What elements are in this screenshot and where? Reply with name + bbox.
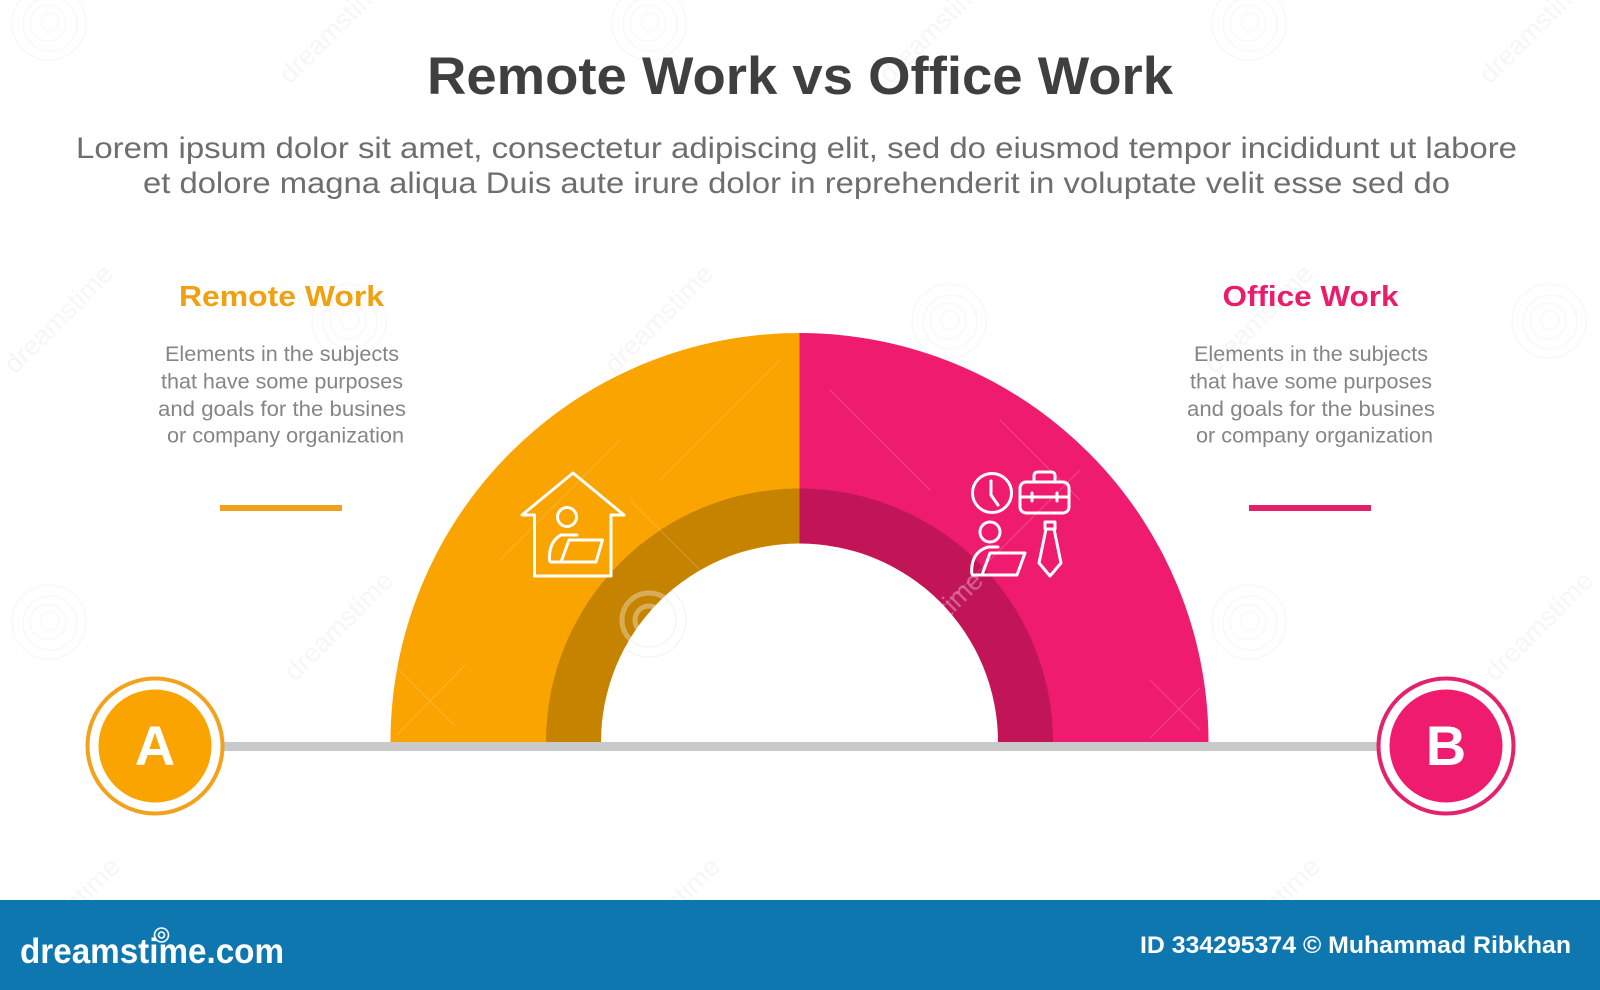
description: office work: Elements in the subjects [1194, 342, 1428, 366]
accent line: remote work [220, 505, 342, 511]
inner band: dark pink [800, 488, 1053, 742]
description: remote work [158, 342, 406, 448]
badge B: B [1426, 714, 1466, 777]
badge A: A [135, 714, 175, 777]
badge A [88, 678, 222, 814]
inner white cutout [601, 544, 998, 742]
icon: office work clock, briefcase, worker, tie [972, 472, 1069, 576]
subtitle text [76, 132, 1517, 200]
text: dreamstime [1478, 565, 1599, 686]
watermark spiral on band [622, 593, 676, 647]
description: remote work: Elements in the subjects [165, 342, 399, 366]
accent line: office work [1249, 505, 1371, 511]
heading: remote work: Remote Work [179, 281, 385, 313]
icon: remote work house with person and laptop [522, 473, 624, 576]
description: remote work: that have some purposes [161, 370, 403, 394]
description: office work: that have some purposes [1190, 370, 1432, 394]
semicircle chart [390, 333, 1208, 742]
description: remote work: and goals for the busines [158, 397, 406, 421]
text: dreamstime [1198, 258, 1319, 379]
baseline bar [215, 742, 1385, 751]
watermark on pink band: dreamstime [868, 565, 989, 686]
segment: office work pink [800, 333, 1208, 742]
badge B [1378, 678, 1514, 814]
inner band: dark orange [546, 488, 800, 742]
subtitle text: Lorem ipsum dolor sit amet, consectetur adipiscing elit, sed do eiusmod tempor incididunt ut labore [76, 132, 1517, 165]
title: Remote Work vs Office Work [427, 47, 1174, 106]
text: dreamstime [605, 851, 726, 972]
footer bar [0, 900, 1600, 990]
subtitle text: et dolore magna aliqua Duis aute irure dolor in reprehenderit in voluptate velit esse sed do [143, 167, 1450, 200]
text: dreamstime [598, 258, 719, 379]
panel: remote work [158, 281, 406, 511]
text: dreamstime [0, 258, 119, 379]
segment: remote work orange [390, 333, 800, 742]
description: office work: or company organization [1196, 424, 1433, 448]
text: dreamstime [5, 851, 126, 972]
description: remote work: or company organization [167, 424, 404, 448]
footer credit: ID 334295374 © Muhammad Ribkhan [1140, 932, 1571, 959]
description: office work [1187, 342, 1435, 448]
description: office work: and goals for the busines [1187, 397, 1435, 421]
text: dreamstime [278, 565, 399, 686]
panel: office work [1187, 281, 1435, 511]
heading: office work: Office Work [1222, 281, 1399, 313]
icon: logo spiral [154, 928, 168, 942]
footer logo text: dreamstime.com [20, 932, 284, 971]
text: dreamstime [1205, 851, 1326, 972]
